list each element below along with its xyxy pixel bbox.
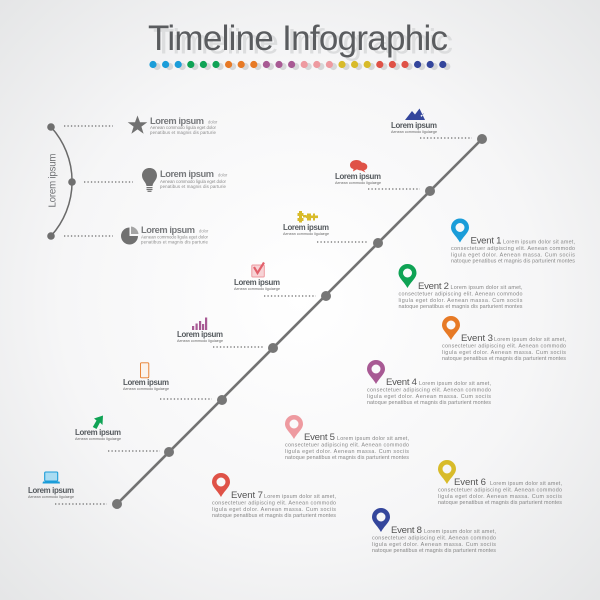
event 2: ligula eget dolor. Aenean massa. Cum sociis bbox=[398, 298, 523, 304]
event 6 bbox=[438, 460, 562, 506]
arc label: Lorem ipsum bbox=[48, 154, 58, 208]
legend text: star: Lorem ipsum bbox=[150, 116, 204, 126]
milestone: laptop: Aenean commodo ligulaege bbox=[28, 495, 74, 499]
event 3: Lorem ipsum dolor sit amet, bbox=[494, 337, 566, 343]
event 4: ligula eget dolor. Aenean massa. Cum sociis bbox=[367, 394, 491, 400]
milestone: checkbox bbox=[234, 262, 280, 291]
event 6: natoque penatibus et magnis dis parturient montes bbox=[438, 500, 562, 506]
event 2: Event 2 bbox=[418, 281, 449, 292]
event 5: Event 5 bbox=[304, 432, 335, 443]
event 5 bbox=[285, 415, 410, 461]
milestone: chat bubbles bbox=[335, 160, 381, 185]
event 7: Event 7 bbox=[231, 490, 263, 501]
event 3: natoque penatibus et magnis dis parturient montes bbox=[442, 356, 566, 362]
pin: event 5 bbox=[285, 415, 303, 439]
event 6: consectetuer adipiscing elit. Aenean commodo bbox=[438, 487, 562, 493]
milestone: mountains bbox=[391, 108, 437, 134]
icon: light bulb bbox=[142, 168, 157, 192]
icon: bar chart bbox=[192, 318, 207, 330]
legend text: star: Aenean commodo ligula eget dolor bbox=[150, 125, 217, 130]
milestone: laptop: Lorem ipsum bbox=[28, 486, 74, 495]
event 3 bbox=[442, 316, 566, 362]
legend text: star bbox=[150, 116, 218, 135]
legend text: bulb: dolor bbox=[218, 172, 228, 178]
event 3: ligula eget dolor. Aenean massa. Cum sociis bbox=[442, 350, 566, 356]
legend text: pie bbox=[141, 225, 209, 244]
milestone: mountains: Aenean commodo ligulaege bbox=[391, 130, 437, 134]
event 7: consectetuer adipiscing elit. Aenean commodo bbox=[212, 500, 336, 506]
milestone: arrow: Lorem ipsum bbox=[75, 428, 121, 437]
event 8: consectetuer adipiscing elit. Aenean commodo bbox=[372, 535, 496, 541]
pin: event 4 bbox=[367, 360, 385, 384]
milestone: checkbox: Aenean commodo ligulaege bbox=[234, 287, 280, 291]
milestone: puzzle: Aenean commodo ligulaege bbox=[283, 232, 329, 236]
event 8: Event 8 bbox=[391, 525, 422, 536]
event 1: Event 1 bbox=[470, 236, 502, 246]
milestone: bar chart bbox=[177, 318, 223, 343]
event 4: Lorem ipsum dolor sit amet, bbox=[419, 381, 492, 387]
panel: left arc with legend bbox=[47, 116, 228, 244]
event 8 bbox=[372, 508, 496, 554]
milestone: puzzle: Lorem ipsum bbox=[283, 223, 329, 232]
event 5: consectetuer adipiscing elit. Aenean commodo bbox=[285, 442, 409, 448]
event 1: natoque penatibus et magnis dis parturient montes bbox=[451, 259, 575, 265]
event 6: Lorem ipsum dolor sit amet, bbox=[490, 481, 562, 487]
event 2 bbox=[398, 264, 523, 310]
milestone: arrow bbox=[75, 416, 121, 441]
event 1: Lorem ipsum dolor sit amet, bbox=[503, 240, 576, 246]
legend text: star: penatibus et magnis dis parturie bbox=[150, 130, 217, 135]
icon: laptop bbox=[42, 472, 60, 484]
milestone: phone: Aenean commodo ligulaege bbox=[123, 387, 169, 391]
icon: green arrow bbox=[93, 416, 103, 429]
icon: star bbox=[128, 116, 147, 134]
legend text: pie: dolor bbox=[199, 228, 209, 234]
pin: event 6 bbox=[438, 460, 456, 484]
pin: event 8 bbox=[372, 508, 390, 532]
event 1: ligula eget dolor. Aenean massa. Cum sociis bbox=[451, 252, 575, 258]
title: Timeline Infographic bbox=[153, 22, 453, 62]
event 2: consectetuer adipiscing elit. Aenean commodo bbox=[398, 291, 522, 297]
event 7: Lorem ipsum dolor sit amet, bbox=[264, 494, 336, 500]
milestone: laptop bbox=[28, 472, 74, 499]
milestone: phone: Lorem ipsum bbox=[123, 378, 169, 387]
milestone: phone bbox=[123, 363, 169, 391]
event 8: natoque penatibus et magnis dis parturient montes bbox=[372, 548, 496, 554]
event 2: natoque penatibus et magnis dis parturient montes bbox=[398, 304, 523, 310]
legend text: pie: penatibus et magnis dis parturie bbox=[141, 240, 209, 244]
icon: checkbox bbox=[252, 262, 264, 277]
event 7: natoque penatibus et magnis dis parturient montes bbox=[212, 513, 336, 519]
event 4 bbox=[367, 360, 492, 406]
legend text: bulb: penatibus et magnis dis parturie bbox=[160, 184, 227, 189]
event 6: ligula eget dolor. Aenean massa. Cum sociis bbox=[438, 494, 562, 500]
event 4: Event 4 bbox=[386, 377, 418, 388]
event 4: consectetuer adipiscing elit. Aenean commodo bbox=[367, 387, 491, 393]
pin: event 1 bbox=[451, 218, 469, 242]
milestone: mountains: Lorem ipsum bbox=[391, 121, 437, 130]
pin: event 7 bbox=[212, 473, 230, 497]
event 5: ligula eget dolor. Aenean massa. Cum sociis bbox=[285, 449, 409, 455]
icon: puzzle bbox=[298, 211, 318, 222]
pin: event 3 bbox=[442, 316, 460, 340]
milestone: puzzle bbox=[283, 211, 329, 236]
event 5: natoque penatibus et magnis dis parturient montes bbox=[285, 455, 409, 461]
pin: event 2 bbox=[398, 264, 416, 288]
milestone: chat bubbles: Lorem ipsum bbox=[335, 172, 381, 181]
arc and nodes bbox=[47, 123, 133, 240]
icon: phone bbox=[140, 363, 149, 378]
title: Timeline Infographic bbox=[148, 19, 448, 58]
event 3: consectetuer adipiscing elit. Aenean commodo bbox=[442, 343, 566, 349]
event 6: Event 6 bbox=[454, 477, 486, 488]
legend text: bulb bbox=[160, 169, 228, 189]
milestone: checkbox: Lorem ipsum bbox=[234, 278, 280, 287]
event 7 bbox=[212, 473, 336, 519]
event 7: ligula eget dolor. Aenean massa. Cum sociis bbox=[212, 507, 336, 513]
icon: pie chart bbox=[121, 226, 138, 244]
milestone: chat bubbles: Aenean commodo ligulaege bbox=[335, 181, 381, 185]
event 1 bbox=[451, 218, 576, 265]
event 2: Lorem ipsum dolor sit amet, bbox=[450, 285, 523, 291]
event 5: Lorem ipsum dolor sit amet, bbox=[337, 436, 410, 442]
event 4: natoque penatibus et magnis dis parturient montes bbox=[367, 400, 491, 406]
milestone: arrow: Aenean commodo ligulaege bbox=[75, 437, 121, 441]
title colour dots bbox=[149, 61, 450, 70]
event 1: consectetuer adipiscing elit. Aenean commodo bbox=[451, 246, 575, 252]
milestone: bar chart: Lorem ipsum bbox=[177, 330, 223, 339]
icon: chat bubbles bbox=[350, 160, 367, 172]
legend text: pie: Lorem ipsum bbox=[141, 225, 195, 235]
legend text: pie: Aenean commodo ligula eget dolor bbox=[141, 234, 209, 240]
event 8: Lorem ipsum dolor sit amet, bbox=[424, 529, 496, 535]
icon: mountains bbox=[405, 108, 425, 120]
event 3: Event 3 bbox=[461, 333, 493, 344]
legend text: star: dolor bbox=[208, 120, 218, 124]
legend text: bulb: Lorem ipsum bbox=[160, 169, 214, 179]
timeline line with nodes bbox=[55, 134, 487, 509]
event 8: ligula eget dolor. Aenean massa. Cum sociis bbox=[372, 542, 496, 548]
milestone: bar chart: Aenean commodo ligulaege bbox=[177, 339, 223, 343]
legend text: bulb: Aenean commodo ligula eget dolor bbox=[160, 179, 227, 184]
